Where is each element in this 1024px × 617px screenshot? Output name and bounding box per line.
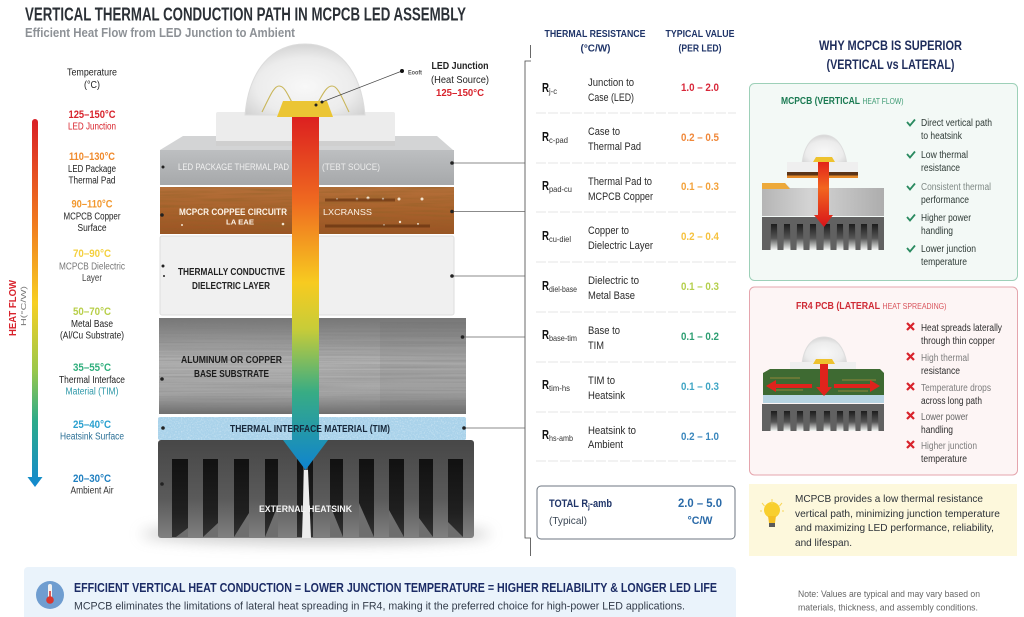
cross bullet 5 [907, 441, 977, 465]
panel: MCPCB vertical [750, 84, 1018, 280]
panel heading: MCPCB (VERTICAL [781, 95, 860, 107]
row: R base-tim: base-tim [549, 333, 577, 343]
metal base layer [159, 318, 466, 414]
temp: metal base: (Al/Cu Substrate) [60, 330, 124, 342]
row: R hs-amb: R [542, 427, 549, 442]
temp: TIM: Material (TIM) [66, 386, 118, 398]
check bullet 4: Higher power [921, 213, 972, 224]
temp: ambient air: Ambient Air [70, 486, 114, 496]
temp: dielectric: MCPCB Dielectric [59, 262, 125, 272]
vertical heat flow arrow [283, 117, 328, 470]
check bullet 5 [907, 244, 976, 268]
note [798, 589, 980, 612]
total box: 2.0 – 5.0 [678, 496, 722, 510]
temp: LED junction [68, 109, 116, 132]
temp: LED junction: 125–150°C [68, 109, 116, 121]
LED package [216, 112, 395, 146]
subtitle: Efficient Heat Flow from LED Junction to Ambient [25, 25, 296, 40]
title: VERTICAL THERMAL CONDUCTION PATH IN MCPCB LED ASSEMBLY [25, 4, 466, 24]
temp: TIM: Thermal Interface [59, 375, 125, 386]
row: R base-tim: 0.1 – 0.2 [681, 331, 719, 343]
cross bullet 2 [907, 353, 969, 377]
banner text: MCPCB eliminates the limitations of lateral heat spreading in FR4, making it the preferred choice for high-power LED applications. [74, 600, 685, 612]
check bullet 1 [907, 118, 992, 142]
check bullet 3 [907, 182, 991, 206]
total box [537, 486, 735, 539]
banner heading: EFFICIENT VERTICAL HEAT CONDUCTION = LOWER JUNCTION TEMPERATURE = HIGHER RELIABILITY & LONGER LED LIFE [74, 580, 717, 595]
layer labels: LED PACKAGE THERMAL PAD [178, 162, 289, 172]
panel heading: HEAT FLOW) [862, 97, 904, 106]
temp: thermal pad: Thermal Pad [68, 176, 116, 186]
row: R base-tim: Base to [588, 325, 620, 337]
table headings [544, 29, 735, 54]
temp: copper surface: 90–110°C [72, 198, 113, 210]
row: R hs-amb: Ambient [588, 439, 623, 451]
resistance table [542, 77, 720, 451]
cross bullet 2: High thermal [921, 353, 969, 364]
table headings: (PER LED) [678, 44, 722, 54]
layer labels: (TEBT SOUCE) [322, 162, 380, 172]
right column heading: WHY MCPCB IS SUPERIOR [819, 38, 962, 53]
total box: (Typical) [549, 515, 587, 527]
temp: dielectric: 70–90°C [73, 248, 111, 260]
temperature heading [67, 68, 117, 91]
table headings: THERMAL RESISTANCE [544, 29, 646, 40]
total box: °C/W [688, 515, 713, 527]
panel: FR4 lateral [750, 287, 1018, 475]
row: R hs-amb: hs-amb [549, 433, 573, 443]
temp: thermal pad: 110–130°C [69, 151, 115, 163]
total box: j [587, 502, 590, 511]
row separators [536, 113, 736, 461]
layer labels: THERMALLY CONDUCTIVE [178, 267, 285, 278]
drawback list [907, 323, 1002, 465]
temp: heatsink surface: 25–40°C [73, 419, 111, 431]
LED junction callout: LED Junction [432, 60, 488, 72]
check bullet 2 [907, 150, 968, 174]
row: R pad-cu: MCPCB Copper [588, 191, 653, 203]
temp: TIM [59, 362, 125, 398]
cross bullet 4: handling [921, 425, 953, 436]
table headings: TYPICAL VALUE [666, 29, 735, 40]
temp: thermal pad [68, 151, 116, 186]
layer labels: EXTERNAL HEATSINK [259, 504, 352, 515]
row: R cu-diel: Copper to [588, 225, 629, 237]
LED dome [245, 44, 365, 115]
row: R base-tim [542, 325, 719, 352]
check bullet 1: to heatsink [921, 131, 963, 142]
row: R c-pad: R [542, 129, 549, 144]
row: R cu-diel: cu-diel [549, 234, 571, 244]
LED chip [277, 101, 333, 117]
row: R cu-diel: Dielectric Layer [588, 240, 653, 252]
cross bullet 1 [907, 323, 1002, 347]
note: Note: Values are typical and may vary based on [798, 589, 980, 599]
layer labels: ALUMINUM OR COPPER [181, 355, 282, 366]
note: materials, thickness, and assembly conditions. [798, 602, 978, 612]
heat flow label: HEAT FLOW [7, 280, 19, 336]
bottom banner [24, 567, 736, 617]
check bullet 3: performance [921, 195, 969, 206]
check bullet 2: resistance [921, 163, 960, 174]
row: R j-c: 1.0 – 2.0 [681, 82, 719, 94]
layer marker dots [160, 166, 165, 486]
row: R hs-amb: Heatsink to [588, 425, 636, 437]
temp: dielectric [59, 248, 125, 284]
row: R j-c [542, 77, 719, 104]
row: R pad-cu: Thermal Pad to [588, 176, 652, 188]
temp: metal base [60, 306, 124, 342]
temp: copper surface [64, 198, 121, 234]
layer labels: MCPCR COPPEE CIRCUITR [179, 207, 287, 217]
row: R cu-diel: R [542, 228, 549, 243]
right column heading [819, 38, 962, 72]
heat flow label [7, 280, 28, 336]
temp: metal base: Metal Base [71, 319, 113, 330]
check bullet 4: handling [921, 226, 953, 237]
panel heading: FR4 PCB (LATERAL [796, 300, 880, 312]
dielectric layer [160, 236, 454, 315]
row: R pad-cu [542, 176, 719, 203]
cross bullet 4: Lower power [921, 412, 969, 423]
temperature scale column [59, 68, 125, 496]
row: R diel-base: diel-base [549, 284, 577, 294]
copper layer [160, 187, 454, 234]
row: R base-tim: TIM [588, 340, 604, 352]
benefit list [907, 118, 992, 268]
temp: TIM: 35–55°C [73, 362, 111, 374]
row: R c-pad: 0.2 – 0.5 [681, 132, 719, 144]
temp: heatsink surface: Heatsink Surface [60, 432, 124, 442]
row: R tim-hs [542, 375, 719, 402]
row: R tim-hs: 0.1 – 0.3 [681, 381, 719, 393]
heat flow arrow [28, 119, 42, 487]
layer labels [178, 162, 390, 515]
row: R c-pad: Thermal Pad [588, 141, 641, 153]
row: R c-pad: c-pad [549, 135, 568, 145]
check bullet 5: Lower junction [921, 244, 976, 255]
temp: metal base: 50–70°C [73, 306, 111, 318]
row: R diel-base: Dielectric to [588, 275, 639, 287]
shadow [141, 524, 491, 544]
row: R j-c: j-c [548, 86, 558, 96]
LED junction callout [431, 60, 489, 99]
temp: ambient air [70, 473, 114, 496]
illustration: vertical heat flow [762, 135, 884, 250]
total box: -amb [590, 498, 612, 510]
callout: MCPCB summary: and maximizing LED performance, reliability, [795, 522, 994, 534]
TIM layer [158, 417, 466, 440]
icon: light bulb [760, 499, 784, 527]
row: R tim-hs: tim-hs [549, 383, 570, 393]
temp: thermal pad: LED Package [68, 164, 116, 175]
row: R diel-base: R [542, 278, 549, 293]
LED junction leader line: Eooft [408, 70, 422, 76]
cross bullet 3: Temperature drops [921, 383, 991, 394]
layer labels: THERMAL INTERFACE MATERIAL (TIM) [230, 424, 390, 435]
check bullet 5: temperature [921, 257, 967, 268]
layer labels: LXCRANSS [323, 207, 372, 217]
external heatsink [158, 440, 474, 538]
temp: ambient air: 20–30°C [73, 473, 111, 485]
temperature heading: (°C) [84, 80, 100, 91]
row: R cu-diel [542, 225, 720, 252]
row: R pad-cu: pad-cu [549, 184, 572, 194]
thermal pad layer [160, 136, 454, 185]
cross bullet 3 [907, 383, 991, 407]
total box: TOTAL R [549, 498, 595, 510]
LED junction callout: (Heat Source) [431, 74, 489, 86]
callout: MCPCB summary: and lifespan. [795, 537, 852, 549]
row: R j-c: Case (LED) [588, 92, 634, 104]
callout: MCPCB summary: MCPCB provides a low thermal resistance [795, 493, 983, 505]
temp: copper surface: MCPCB Copper [64, 212, 121, 222]
illustration: lateral heat spreading [762, 337, 884, 431]
check bullet 1: Direct vertical path [921, 118, 992, 129]
layer labels: LA EAE [226, 218, 254, 226]
row: R pad-cu: R [542, 178, 549, 193]
callout: MCPCB summary: vertical path, minimizing junction temperature [795, 508, 1000, 520]
row: R hs-amb: 0.2 – 1.0 [681, 431, 719, 443]
thermal stack [141, 44, 491, 544]
row: R c-pad: Case to [588, 126, 620, 138]
row: R hs-amb [542, 425, 719, 451]
temp: heatsink surface [60, 419, 124, 442]
row: R cu-diel: 0.2 – 0.4 [681, 231, 720, 243]
layer labels: DIELECTRIC LAYER [192, 281, 270, 292]
row: R j-c: Junction to [588, 77, 634, 89]
callout: MCPCB summary [749, 484, 1017, 556]
LED junction callout: 125–150°C [436, 87, 484, 99]
panel heading: HEAT SPREADING) [882, 302, 947, 311]
icon: thermometer [36, 581, 64, 609]
panel heading [796, 300, 947, 312]
cross bullet 5: Higher junction [921, 441, 977, 452]
cross bullet 1: through thin copper [921, 336, 996, 347]
row: R tim-hs: TIM to [588, 375, 615, 387]
row: R diel-base: Metal Base [588, 290, 635, 302]
table headings: (°C/W) [580, 44, 610, 54]
check bullet 4 [907, 213, 972, 237]
cross bullet 1: Heat spreads laterally [921, 323, 1002, 334]
row: R c-pad [542, 126, 719, 153]
cross bullet 5: temperature [921, 454, 967, 465]
row: R j-c: R [542, 80, 549, 95]
cross bullet 3: across long path [921, 396, 982, 407]
bracket and leader lines [450, 45, 531, 556]
row: R tim-hs: R [542, 377, 549, 392]
cross bullet 4 [907, 412, 969, 436]
row: R diel-base: 0.1 – 0.3 [681, 281, 719, 293]
temp: copper surface: Surface [78, 223, 107, 234]
temp: LED junction: LED Junction [68, 122, 116, 132]
layer labels: BASE SUBSTRATE [194, 369, 269, 380]
row: R pad-cu: 0.1 – 0.3 [681, 181, 719, 193]
temp: dielectric: Layer [82, 273, 103, 284]
row: R tim-hs: Heatsink [588, 390, 625, 402]
check bullet 3: Consistent thermal [921, 182, 991, 193]
cross bullet 2: resistance [921, 366, 960, 377]
row: R base-tim: R [542, 327, 549, 342]
temperature heading: Temperature [67, 68, 117, 78]
right column heading: (VERTICAL vs LATERAL) [826, 57, 954, 72]
row: R diel-base [542, 275, 719, 302]
check bullet 2: Low thermal [921, 150, 968, 161]
LED junction leader line [314, 69, 422, 106]
heat flow label: H(°C/W) [20, 286, 28, 326]
